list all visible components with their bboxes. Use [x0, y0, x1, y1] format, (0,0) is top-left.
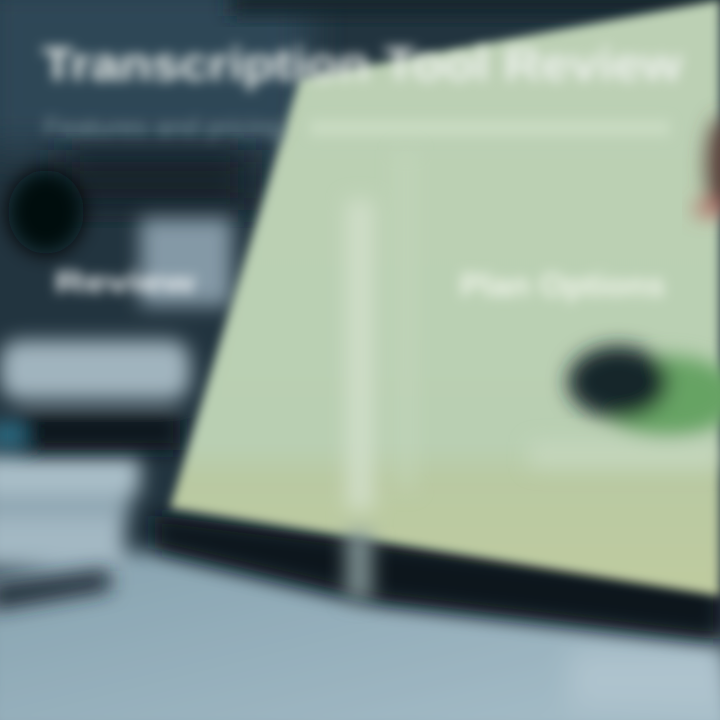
screen heading: Plan Options — [460, 267, 665, 303]
screen shadow — [155, 515, 720, 640]
toggle graphic — [530, 346, 720, 468]
subtitle — [44, 112, 670, 142]
top-right accent — [695, 117, 720, 215]
left-side shapes — [0, 170, 232, 610]
screen divider — [346, 150, 414, 600]
subtitle: Features and pricing — [44, 112, 284, 142]
left panel label: Review — [55, 266, 196, 299]
title: Transcription Tool Review — [42, 38, 682, 90]
panel: green screen — [170, 0, 720, 596]
desk surface — [0, 455, 720, 720]
